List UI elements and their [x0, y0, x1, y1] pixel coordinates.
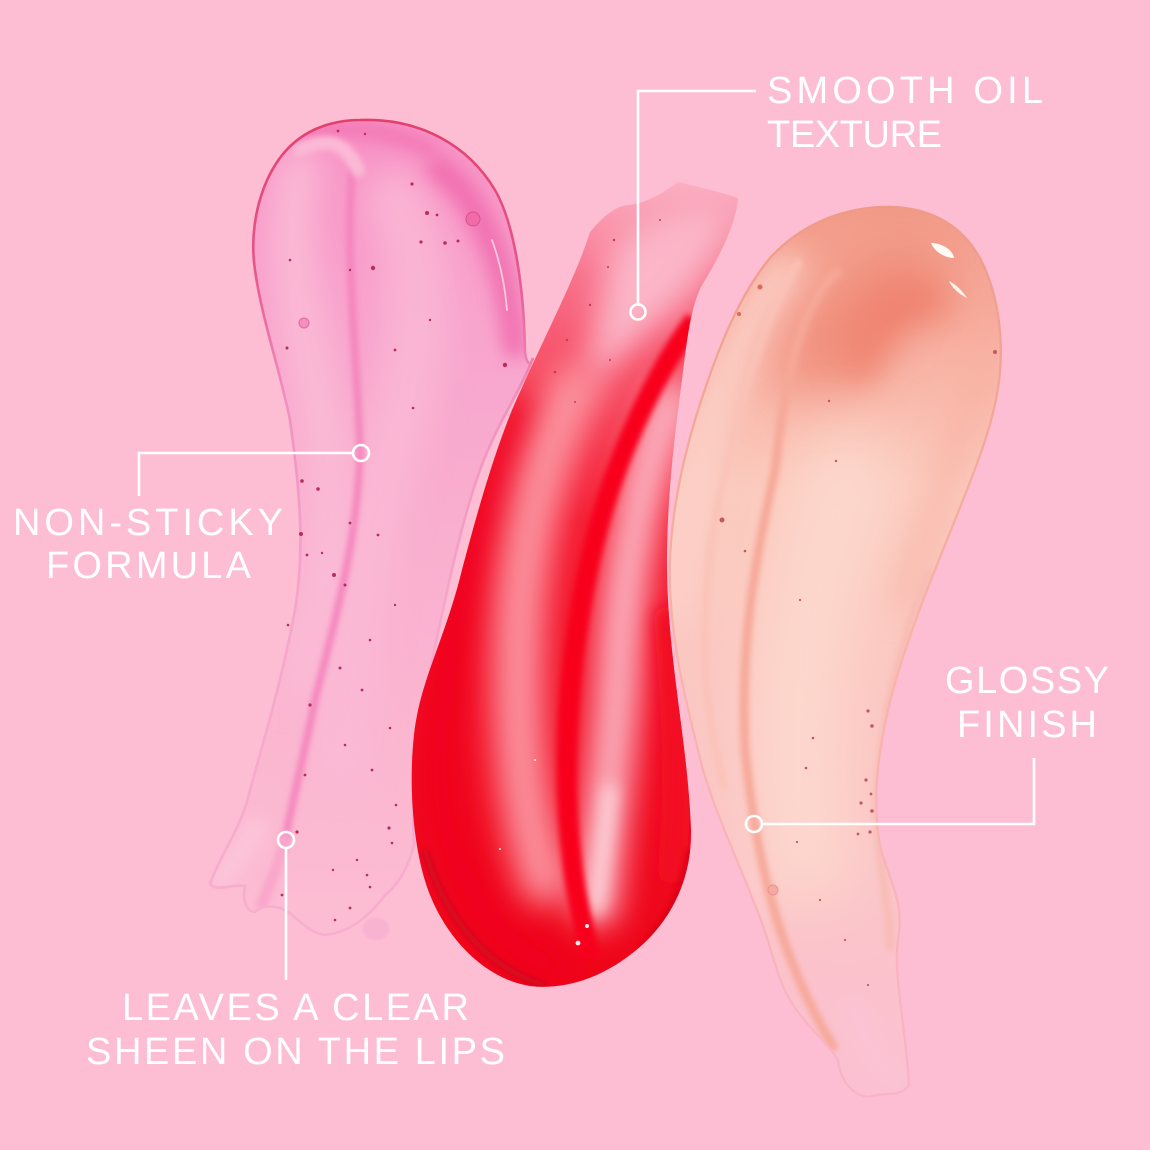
- ridges: [744, 270, 840, 1050]
- leader line: clear sheen: [285, 848, 287, 980]
- coral specks: [720, 350, 997, 986]
- saturated ribbon: [567, 320, 695, 960]
- label: glossy finish: GLOSSY: [945, 660, 1109, 702]
- callout: smooth oil texture: [630, 70, 1043, 320]
- highlight on rim: [492, 240, 507, 310]
- leader line: smooth oil texture: [638, 91, 756, 304]
- pale interior: [798, 440, 860, 900]
- marker: non-sticky formula: [353, 445, 369, 461]
- marker: glossy finish: [746, 816, 762, 832]
- label: smooth oil texture: TEXTURE: [767, 114, 942, 156]
- callout: non-sticky formula: [13, 445, 369, 587]
- red specks: [554, 219, 661, 403]
- marker: smooth oil texture: [630, 304, 646, 320]
- central light band: [518, 390, 575, 880]
- pale top wash: [580, 204, 730, 400]
- leader line: glossy finish: [762, 758, 1034, 824]
- glossy highlights: [931, 243, 954, 258]
- right light band: [596, 400, 672, 905]
- label: non-sticky formula: FORMULA: [46, 545, 252, 587]
- swatch: pink gloss: [200, 110, 540, 950]
- left saturated band: [440, 420, 550, 968]
- leader line: non-sticky formula: [139, 453, 353, 496]
- swatch: coral gloss: [660, 200, 1010, 1110]
- label: glossy finish: FINISH: [957, 704, 1097, 746]
- label: clear sheen: SHEEN ON THE LIPS: [86, 1031, 505, 1073]
- callout: leaves a clear sheen on the lips: [86, 832, 505, 1073]
- gloss highlight: [499, 759, 589, 945]
- callout: glossy finish: [746, 660, 1109, 832]
- label: non-sticky formula: NON-STICKY: [13, 502, 283, 544]
- label: clear sheen: LEAVES A CLEAR: [122, 987, 469, 1029]
- bubbles: [281, 130, 507, 921]
- marker: clear sheen: [278, 832, 294, 848]
- label: smooth oil texture: SMOOTH OIL: [767, 70, 1043, 112]
- swatch: red gloss: [400, 175, 750, 995]
- stray droplet: [363, 918, 389, 940]
